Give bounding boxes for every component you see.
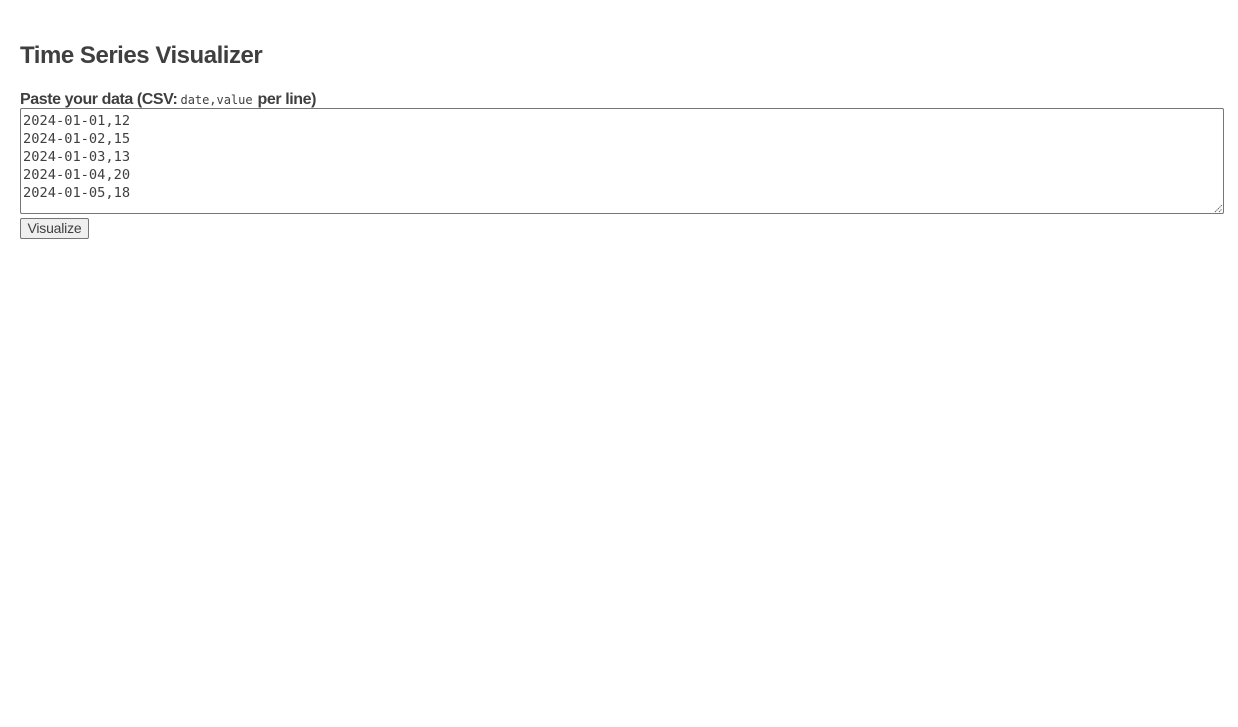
visualize button [20, 218, 89, 239]
data textarea [20, 108, 1224, 214]
data input label: Paste your data (CSV: date,value per line) [20, 91, 316, 108]
csv data lines: 2024-01-01,12 2024-01-02,15 2024-01-03,13 2024-01-04,20 2024-01-05,18 [23, 113, 130, 201]
visualize button: Visualize [28, 220, 81, 236]
title: Time Series Visualizer [20, 42, 262, 69]
icon: resize grip [1214, 204, 1222, 212]
